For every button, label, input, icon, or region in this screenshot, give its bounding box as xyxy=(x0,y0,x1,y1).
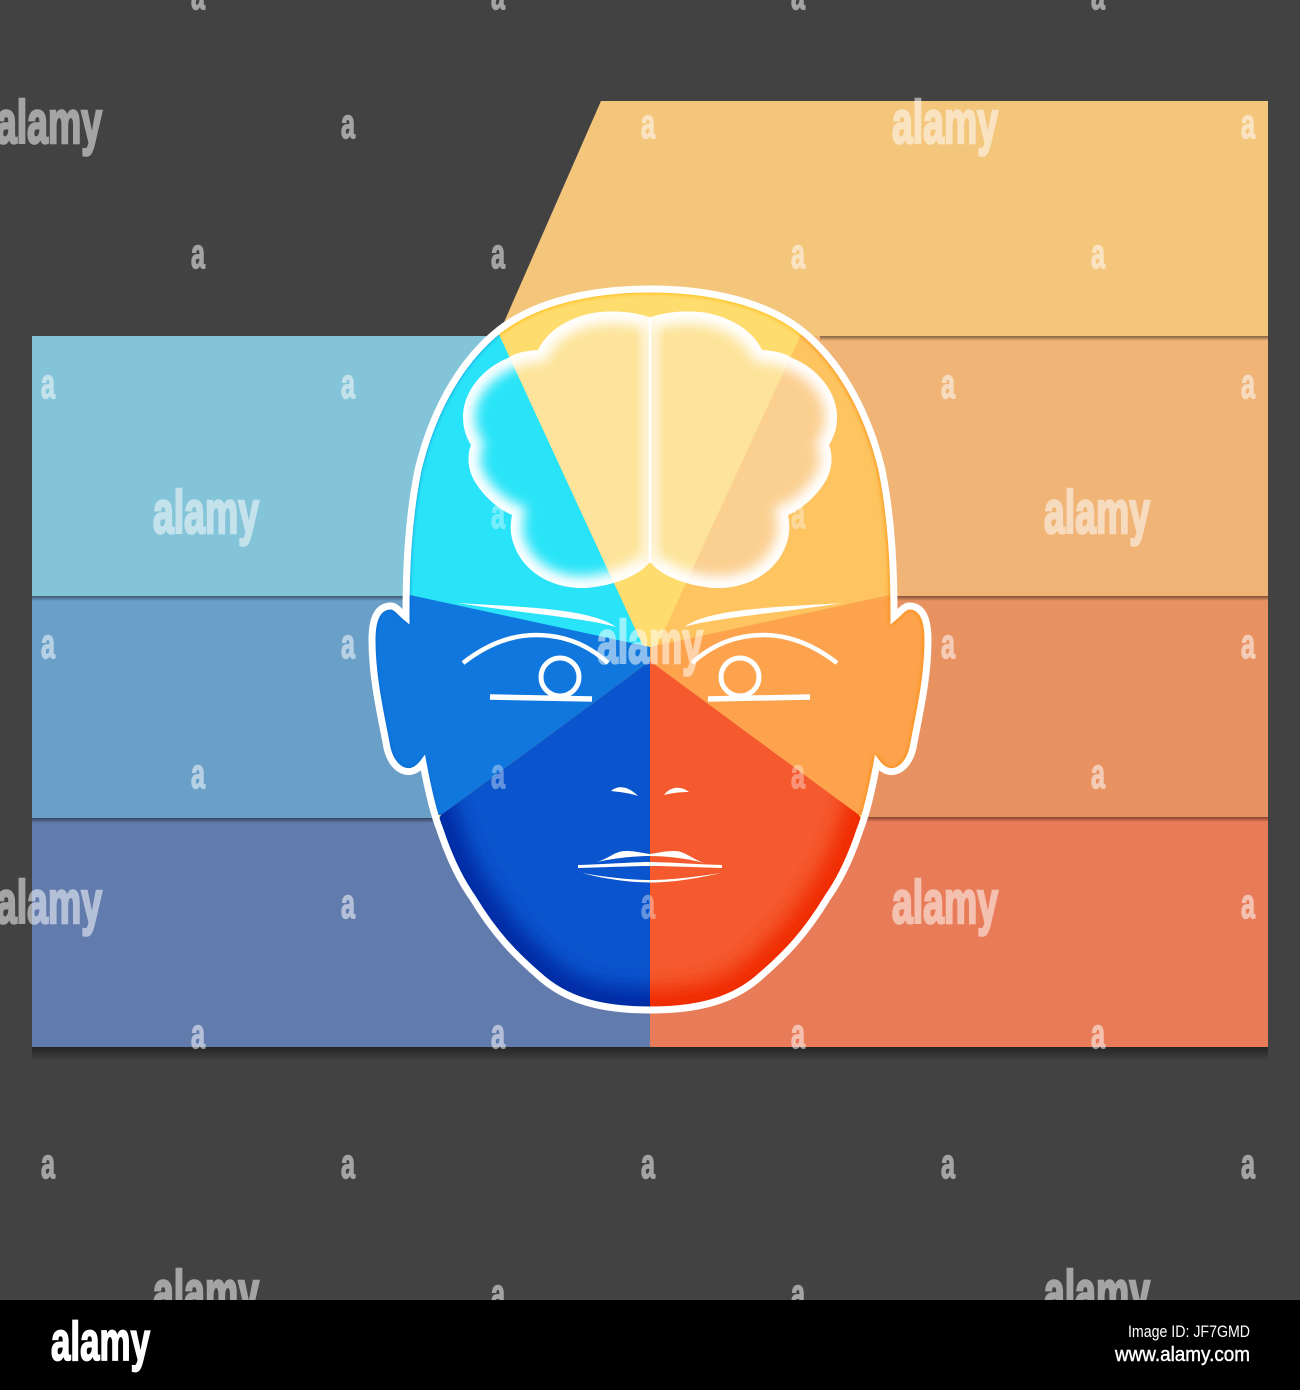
watermark: small marks: a xyxy=(1241,880,1255,927)
eye right xyxy=(692,635,837,699)
watermark: small marks: a xyxy=(941,360,955,407)
nose xyxy=(611,787,689,796)
eye left xyxy=(463,635,608,699)
watermark: large logos: alamy xyxy=(892,869,998,936)
panel: middle left band xyxy=(32,596,652,818)
head xyxy=(368,286,932,1014)
mouth xyxy=(578,851,722,882)
footer bar xyxy=(0,1300,1300,1390)
watermark: small marks: a xyxy=(791,230,805,277)
watermark: marks over head: a xyxy=(491,750,505,797)
watermark: small marks: a xyxy=(1241,620,1255,667)
eyebrow right xyxy=(684,603,843,627)
watermark: small marks: a xyxy=(41,1140,55,1187)
watermark: small marks: a xyxy=(341,880,355,927)
watermark: marks over head xyxy=(491,490,805,927)
band shadows xyxy=(32,336,1268,1061)
watermark: marks over head: a xyxy=(641,880,655,927)
footer logo: alamy xyxy=(51,1310,150,1372)
panel: top left band xyxy=(32,336,652,596)
watermark: small marks: a xyxy=(1091,750,1105,797)
watermark: small marks: a xyxy=(1091,230,1105,277)
watermark: large logos: alamy xyxy=(153,1259,259,1326)
image id: Image ID: JF7GMD xyxy=(1128,1322,1250,1341)
watermark: small marks: a xyxy=(941,620,955,667)
outline of head xyxy=(372,289,928,1010)
watermark: large logos: alamy xyxy=(0,89,102,156)
watermark: small marks: a xyxy=(1241,1140,1255,1187)
brain xyxy=(463,312,837,588)
watermark: large logos: alamy xyxy=(153,479,259,546)
panel: bottom right band xyxy=(650,817,1268,1047)
head colour sectors xyxy=(376,292,924,1006)
watermark: small marks: a xyxy=(1241,100,1255,147)
watermark: small marks: a xyxy=(791,1270,805,1317)
watermark: marks over head: a xyxy=(791,490,805,537)
watermark: small marks: a xyxy=(1091,1010,1105,1057)
eyebrow left xyxy=(457,603,616,627)
panel: second right band xyxy=(640,336,1268,596)
watermark: large logos: alamy xyxy=(1044,479,1150,546)
watermark: small marks: a xyxy=(341,1140,355,1187)
watermark: small marks: a xyxy=(41,620,55,667)
panel: top right band xyxy=(498,101,1268,336)
watermark: small marks: a xyxy=(791,1010,805,1057)
watermark: small marks: a xyxy=(1241,360,1255,407)
watermark: large logos: alamy xyxy=(0,869,102,936)
watermark: small marks: a xyxy=(41,360,55,407)
watermark: small marks: a xyxy=(191,1010,205,1057)
watermark: small marks: a xyxy=(341,100,355,147)
watermark: center logo: alamy xyxy=(597,609,703,676)
watermark: small marks: a xyxy=(341,360,355,407)
watermark: small marks: a xyxy=(641,100,655,147)
watermark: small marks: a xyxy=(491,230,505,277)
watermark: large logos: alamy xyxy=(1044,1259,1150,1326)
watermark: small marks: a xyxy=(191,230,205,277)
watermark: small marks: a xyxy=(491,1010,505,1057)
watermark: small marks: a xyxy=(341,620,355,667)
watermark: small marks: a xyxy=(941,1140,955,1187)
watermark: large logos: alamy xyxy=(892,89,998,156)
panel: third right band xyxy=(640,596,1268,817)
watermark: small marks: a xyxy=(491,1270,505,1317)
watermark: marks over head: a xyxy=(791,750,805,797)
watermark: large logos xyxy=(0,89,1150,1326)
panel: bottom left band xyxy=(32,818,650,1047)
watermark: small marks: a xyxy=(641,1140,655,1187)
watermark: marks over head: a xyxy=(491,490,505,537)
watermark: small marks: a xyxy=(191,750,205,797)
website: www.alamy.com xyxy=(1114,1344,1250,1366)
